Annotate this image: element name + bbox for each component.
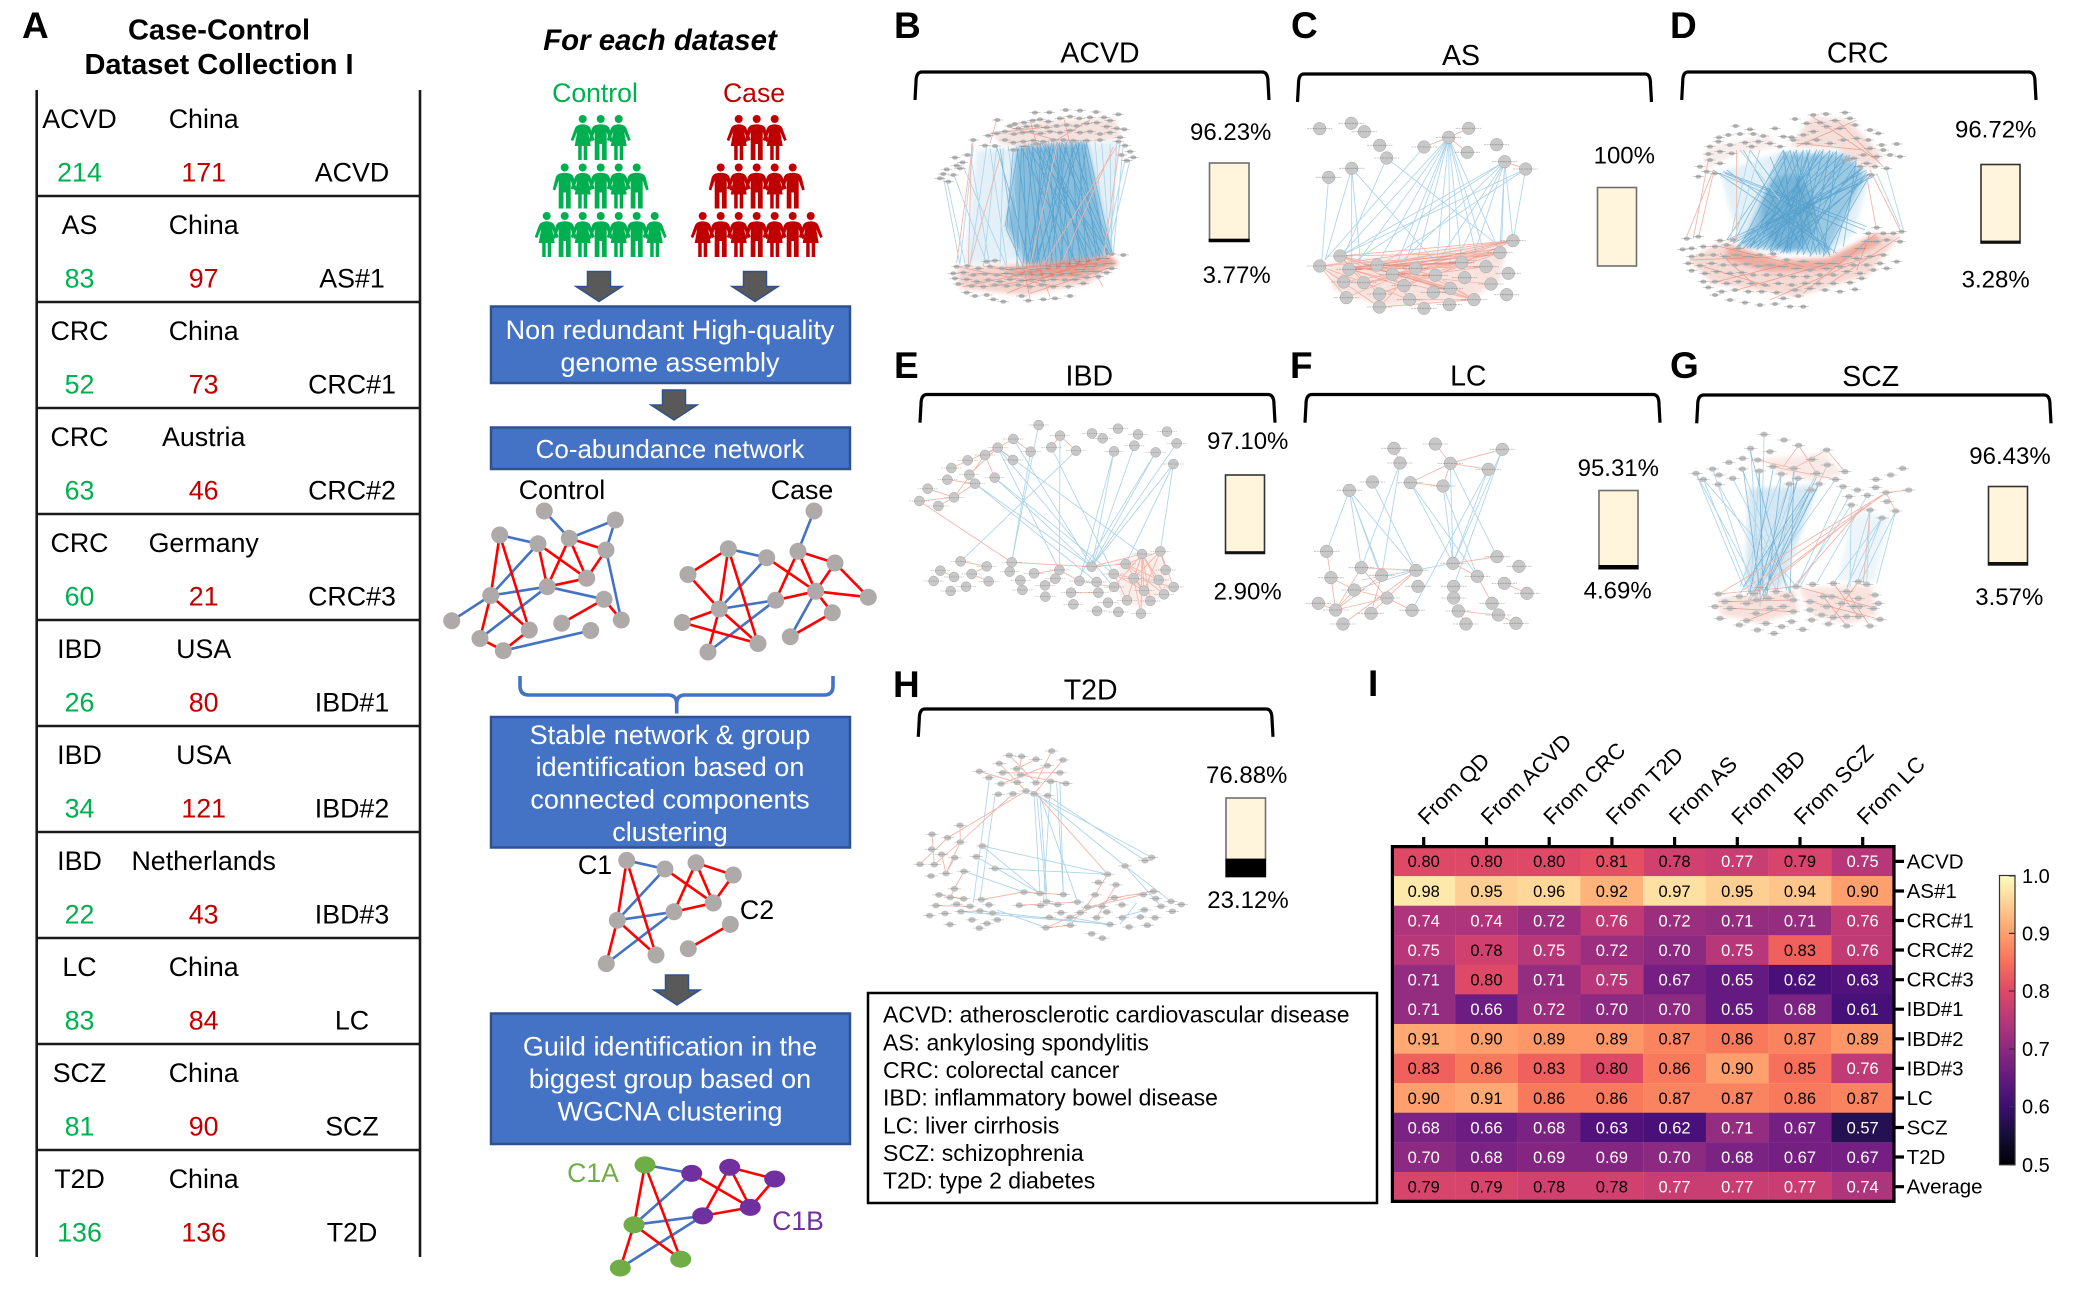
label: C1: C1 [578, 850, 612, 880]
heatmap cells: 0.90 [1408, 1090, 1440, 1108]
table row values: T2D [327, 1218, 377, 1248]
heatmap cells: 0.89 [1847, 1031, 1879, 1049]
heatmap cells: 0.72 [1533, 912, 1565, 930]
heatmap cells: 0.83 [1784, 942, 1816, 960]
heatmap cells: 0.90 [1470, 1031, 1503, 1049]
heatmap cells: 0.87 [1847, 1090, 1879, 1108]
heatmap cells: 0.97 [1658, 883, 1691, 901]
label: C1A: C1A [567, 1158, 619, 1188]
value 97.10%: 97.10% [1207, 428, 1288, 455]
value 96.43%: 96.43% [1969, 443, 2051, 470]
heatmap column labels: From T2D [1601, 742, 1688, 830]
heatmap row labels: IBD#2 [1907, 1028, 1964, 1051]
heatmap row labels: CRC#1 [1907, 910, 1974, 932]
network graph [920, 751, 1181, 938]
label: Case group: Case [723, 78, 785, 108]
heatmap cells: 0.57 [1847, 1119, 1879, 1137]
network graph [1683, 113, 1903, 307]
label: C2: C2 [740, 895, 774, 925]
title: IBD: IBD [1066, 361, 1113, 393]
legend: disease abbreviations: IBD: inflammatory bowel disease [883, 1085, 1218, 1111]
heatmap row labels: IBD#3 [1907, 1057, 1964, 1080]
table rules [36, 90, 421, 1257]
heatmap cells: 0.77 [1721, 1179, 1753, 1197]
table row values: 90 [189, 1112, 219, 1142]
panel B: ACVD network [894, 5, 1271, 302]
heatmap cells: 0.80 [1533, 853, 1565, 871]
panel C: AS network [1291, 5, 1655, 308]
workflow column [443, 24, 877, 1276]
panel label C: C [1291, 5, 1318, 46]
arrow: case to assembly [732, 272, 778, 302]
stacked bar: 96.43 / 3.57 [1988, 486, 2028, 565]
table row values: CRC#3 [308, 582, 396, 612]
box: genome assembly: Non redundant High-quality [506, 315, 835, 345]
icon: case people pyramid [691, 115, 823, 257]
box: guild identification [491, 1014, 850, 1144]
heatmap row labels: CRC#2 [1907, 939, 1974, 962]
label: C1B: C1B [772, 1206, 824, 1236]
heatmap cells: 0.70 [1658, 942, 1691, 960]
title: CRC: CRC [1827, 38, 1889, 70]
colour scale bar [2000, 866, 2050, 1177]
box: stable network identification: identification based on [536, 752, 804, 782]
table row values: 136 [57, 1218, 102, 1248]
bracket [915, 72, 1269, 100]
arrow: control to assembly [576, 272, 622, 302]
panel H: T2D network [893, 664, 1289, 938]
table row values: 46 [189, 476, 219, 506]
heatmap row labels: LC [1907, 1087, 1933, 1110]
network graph [1320, 123, 1526, 308]
heatmap cells: 0.68 [1533, 1119, 1565, 1137]
box: stable network identification: Stable network & group [530, 720, 810, 750]
heatmap cells: 0.80 [1596, 1060, 1628, 1078]
heatmap row labels: CRC#3 [1907, 969, 1974, 992]
table row values: T2D [54, 1164, 105, 1194]
heatmap cells: 0.89 [1533, 1031, 1565, 1049]
heatmap column labels: From AS [1664, 751, 1742, 830]
heatmap cells: 0.96 [1533, 883, 1565, 901]
panel label E: E [894, 345, 919, 386]
stacked bar: 96.72 / 3.28 [1980, 164, 2020, 244]
heatmap cells: 0.78 [1470, 942, 1503, 960]
heatmap cells: 0.94 [1784, 883, 1816, 901]
table row values: CRC [50, 316, 109, 346]
panel label H: H [893, 664, 920, 705]
legend: disease abbreviations: T2D: type 2 diabetes [883, 1168, 1095, 1194]
box: co-abundance network: Co-abundance network [536, 434, 805, 464]
table row values: 52 [65, 370, 94, 400]
heatmap cells: 0.63 [1596, 1119, 1628, 1137]
heatmap column labels [1413, 729, 1930, 830]
panel D: CRC network [1670, 5, 2036, 307]
box: guild identification: WGCNA clustering [557, 1096, 783, 1126]
table row values [42, 104, 396, 1248]
label: Control network: Control [519, 475, 605, 505]
network graph [919, 425, 1177, 614]
heatmap cells: 0.75 [1533, 942, 1565, 960]
heatmap row labels [1907, 850, 1983, 1199]
table row values: CRC#2 [308, 476, 396, 506]
box: genome assembly: genome assembly [560, 348, 780, 378]
heatmap column labels: From QD [1413, 748, 1494, 830]
table row values: LC [62, 952, 97, 982]
panel label A: A [22, 5, 49, 46]
value 4.69%: 4.69% [1584, 577, 1652, 604]
table row values: IBD [57, 740, 102, 770]
title: AS: AS [1442, 40, 1480, 72]
heatmap cells: 0.85 [1784, 1060, 1816, 1078]
stacked bar: 97.10 / 2.90 [1225, 475, 1265, 554]
colour scale bar: 0.9 [2022, 924, 2050, 946]
value 3.77%: 3.77% [1203, 262, 1271, 289]
heatmap cells: 0.74 [1847, 1179, 1879, 1197]
value 3.57%: 3.57% [1975, 584, 2043, 611]
table row values: China [169, 952, 239, 982]
arrow: assembly to network [651, 390, 697, 420]
table row values: SCZ [53, 1058, 106, 1088]
table row values: USA [176, 740, 231, 770]
heatmap cells: 0.86 [1470, 1060, 1503, 1078]
panel G: SCZ network [1670, 345, 2051, 633]
bracket [1305, 394, 1660, 423]
heatmap cells: 0.75 [1721, 942, 1753, 960]
table row values: IBD [57, 846, 102, 876]
heatmap cells: 0.79 [1408, 1179, 1440, 1197]
heatmap cells: 0.76 [1596, 912, 1628, 930]
diagram: control network [443, 502, 630, 659]
value 95.31%: 95.31% [1578, 455, 1659, 482]
table row values: China [169, 316, 239, 346]
panel label D: D [1670, 5, 1697, 46]
table row values: 136 [181, 1218, 226, 1248]
heatmap cells: 0.72 [1596, 942, 1628, 960]
colour scale bar: 0.6 [2022, 1097, 2050, 1119]
heatmap cells: 0.62 [1784, 972, 1816, 990]
value 96.23%: 96.23% [1190, 119, 1271, 146]
stacked bar: 76.88 / 23.12 [1226, 798, 1266, 877]
box: guild identification: Guild identification in the [523, 1032, 817, 1062]
heatmap column labels: From CRC [1538, 737, 1630, 830]
heatmap cells: 0.86 [1784, 1090, 1816, 1108]
legend: disease abbreviations: SCZ: schizophrenia [883, 1140, 1084, 1166]
heatmap row labels: Average [1907, 1176, 1983, 1199]
title: SCZ: SCZ [1842, 361, 1899, 393]
heatmap cells: 0.75 [1408, 942, 1440, 960]
heatmap cells: 0.79 [1470, 1179, 1503, 1197]
table row values: Germany [149, 528, 259, 558]
table row values: USA [176, 634, 231, 664]
heatmap cells: 0.76 [1847, 912, 1879, 930]
heatmap cells: 0.68 [1470, 1149, 1503, 1167]
colour scale bar: 0.8 [2022, 981, 2050, 1003]
table row values: China [169, 210, 239, 240]
diagram: case network [674, 502, 877, 660]
heatmap cells: 0.87 [1784, 1031, 1816, 1049]
title: LC: LC [1450, 361, 1487, 393]
heatmap cells: 0.77 [1658, 1179, 1691, 1197]
panel label F: F [1290, 345, 1313, 386]
bracket [920, 394, 1275, 423]
heatmap cells: 0.91 [1408, 1031, 1440, 1049]
heatmap cells: 0.86 [1533, 1090, 1565, 1108]
table row values: IBD#1 [315, 688, 389, 718]
heatmap cells: 0.95 [1470, 883, 1503, 901]
heatmap cells: 0.70 [1658, 1149, 1691, 1167]
title: T2D: T2D [1064, 674, 1118, 706]
table row values: Netherlands [131, 846, 276, 876]
network graph [940, 110, 1133, 302]
heatmap cells: 0.83 [1533, 1060, 1565, 1078]
label: Case network: Case [771, 475, 833, 505]
table row values: AS#1 [319, 264, 385, 294]
bracket [1682, 72, 2036, 100]
heatmap cells: 0.67 [1847, 1149, 1879, 1167]
bracket [1298, 74, 1652, 102]
table row values: 73 [189, 370, 219, 400]
value 96.72%: 96.72% [1955, 116, 2036, 143]
table row values: LC [335, 1006, 369, 1036]
heatmap cells: 0.69 [1596, 1149, 1628, 1167]
value 3.28%: 3.28% [1962, 267, 2030, 294]
table row values: 81 [65, 1112, 94, 1142]
network graph [1318, 444, 1527, 624]
table row values: 121 [181, 794, 226, 824]
heatmap cells: 0.68 [1784, 1001, 1816, 1019]
heatmap cells: 0.63 [1847, 972, 1879, 990]
heatmap column labels: From LC [1852, 751, 1930, 830]
heatmap cells: 0.71 [1408, 1001, 1440, 1019]
heatmap cells: 0.77 [1784, 1179, 1816, 1197]
table row values: China [169, 1164, 239, 1194]
table row values: 21 [189, 582, 219, 612]
heatmap cells: 0.65 [1721, 972, 1753, 990]
legend: disease abbreviations: ACVD: atherosclerotic cardiovascular disease [883, 1002, 1350, 1028]
table row values: 26 [65, 688, 94, 718]
table row values: ACVD [315, 158, 389, 188]
heatmap cells: 0.90 [1847, 883, 1879, 901]
heatmap cells: 0.71 [1533, 972, 1565, 990]
heatmap cells: 0.74 [1408, 912, 1440, 930]
value 76.88%: 76.88% [1206, 762, 1287, 789]
table row values: 83 [65, 264, 94, 294]
heatmap cells: 0.70 [1658, 1001, 1691, 1019]
heatmap cells: 0.87 [1658, 1031, 1691, 1049]
heatmap cells: 0.67 [1658, 972, 1691, 990]
heatmap cells: 0.76 [1847, 942, 1879, 960]
table row values: 22 [65, 900, 94, 930]
heatmap cells: 0.66 [1470, 1119, 1503, 1137]
heatmap cells: 0.90 [1721, 1060, 1753, 1078]
table row values: 43 [189, 900, 219, 930]
colour scale bar: 0.5 [2022, 1155, 2050, 1177]
bracket [1697, 395, 2051, 423]
heading: Case-Control Dataset Collection I: Case-Control [128, 14, 310, 46]
heatmap cells: 0.62 [1658, 1119, 1691, 1137]
colour scale bar: 1.0 [2022, 866, 2050, 888]
table row values: SCZ [325, 1112, 379, 1142]
heatmap column labels: From IBD [1726, 745, 1811, 830]
stacked bar: 95.31 / 4.69 [1598, 490, 1638, 569]
arrow: components to guilds [654, 975, 700, 1005]
table row values: AS [62, 210, 97, 240]
heatmap cells: 0.92 [1596, 883, 1628, 901]
table row values: IBD#2 [315, 794, 389, 824]
heatmap cells: 0.80 [1470, 853, 1503, 871]
heatmap cells: 0.87 [1658, 1090, 1691, 1108]
box: stable network identification [491, 717, 850, 848]
heatmap cells: 0.71 [1784, 912, 1816, 930]
table row values: 83 [65, 1006, 94, 1036]
table row values: IBD [57, 634, 102, 664]
legend: disease abbreviations: LC: liver cirrhosis [883, 1112, 1059, 1138]
legend: disease abbreviations: AS: ankylosing spondylitis [883, 1029, 1149, 1055]
heatmap cells: 0.70 [1596, 1001, 1628, 1019]
title: ACVD: ACVD [1060, 38, 1140, 70]
table row values: IBD#3 [315, 900, 389, 930]
panel E: IBD network [894, 345, 1288, 614]
label: Control group: Control [552, 78, 638, 108]
heatmap column labels: From ACVD [1476, 729, 1577, 830]
heatmap cells: 0.87 [1721, 1090, 1753, 1108]
table row values: 60 [65, 582, 94, 612]
heatmap row labels: T2D [1907, 1146, 1945, 1169]
heatmap cells: 0.76 [1847, 1060, 1879, 1078]
table row values: 214 [57, 158, 102, 188]
value 23.12%: 23.12% [1207, 887, 1289, 914]
heatmap cells: 0.78 [1658, 853, 1691, 871]
bracket [918, 709, 1273, 737]
diagram: C1 and C2 components [598, 852, 742, 972]
heatmap cells: 0.70 [1408, 1149, 1440, 1167]
heatmap cells: 0.68 [1408, 1119, 1440, 1137]
heatmap cells: 0.74 [1470, 912, 1503, 930]
legend: disease abbreviations [868, 993, 1377, 1203]
value 2.90%: 2.90% [1214, 578, 1282, 605]
heatmap cells: 0.67 [1784, 1149, 1816, 1167]
heatmap cells: 0.61 [1847, 1001, 1879, 1019]
heatmap cells: 0.66 [1470, 1001, 1503, 1019]
panel label I: I [1368, 663, 1378, 704]
heatmap cells: 0.72 [1658, 912, 1691, 930]
heatmap cells: 0.86 [1658, 1060, 1691, 1078]
table row values: 171 [181, 158, 226, 188]
heatmap cells: 0.71 [1721, 1119, 1753, 1137]
heatmap row labels: IBD#1 [1907, 998, 1964, 1021]
table row values: China [169, 104, 239, 134]
stacked bar: 100% [1598, 188, 1636, 266]
network graph [1696, 434, 1909, 633]
icon: control people pyramid [535, 115, 667, 257]
table row values: 63 [65, 476, 94, 506]
heatmap cells: 0.83 [1408, 1060, 1440, 1078]
panel label G: G [1670, 345, 1699, 386]
heatmap cells [1392, 847, 1894, 1202]
heatmap row labels: ACVD [1907, 850, 1964, 874]
heatmap cells: 0.72 [1533, 1001, 1565, 1019]
heading: Case-Control Dataset Collection I: Dataset Collection I [84, 49, 354, 81]
heatmap cells: 0.75 [1847, 853, 1879, 871]
table row values: 97 [189, 264, 219, 294]
heatmap cells: 0.80 [1470, 972, 1503, 990]
heatmap row labels: SCZ [1907, 1116, 1948, 1140]
box: guild identification: biggest group based on [529, 1064, 811, 1094]
diagram: guild network [610, 1156, 785, 1276]
heatmap cells: 0.89 [1596, 1031, 1628, 1049]
heatmap column labels: From SCZ [1789, 740, 1878, 830]
heatmap cells: 0.91 [1470, 1090, 1503, 1108]
box: stable network identification: connected components [530, 784, 810, 814]
heatmap cells: 0.65 [1721, 1001, 1753, 1019]
heatmap cells: 0.75 [1596, 972, 1628, 990]
heatmap cells: 0.77 [1721, 853, 1753, 871]
heatmap frame and ticks [1392, 837, 1904, 1201]
panel F: LC network [1290, 345, 1660, 624]
value 100%: 100% [1594, 142, 1655, 169]
panel I: heatmap [1368, 663, 2050, 1202]
heading: For each dataset: For each dataset [543, 24, 778, 57]
heatmap cells: 0.78 [1533, 1179, 1565, 1197]
heatmap cells: 0.86 [1721, 1031, 1753, 1049]
table row values: CRC [50, 528, 109, 558]
table row values: 80 [189, 688, 219, 718]
heatmap cells: 0.95 [1721, 883, 1753, 901]
heatmap cells: 0.69 [1533, 1149, 1565, 1167]
heatmap cells: 0.80 [1408, 853, 1440, 871]
colour scale bar: 0.7 [2022, 1039, 2050, 1061]
table row values: Austria [162, 422, 245, 452]
heatmap cells: 0.86 [1596, 1090, 1628, 1108]
box: co-abundance network [491, 428, 850, 469]
heatmap cells: 0.68 [1721, 1149, 1753, 1167]
table row values: China [169, 1058, 239, 1088]
heatmap cells: 0.98 [1408, 883, 1440, 901]
heatmap row labels: AS#1 [1907, 880, 1957, 903]
table row values: 34 [65, 794, 94, 824]
box: stable network identification: clustering [612, 817, 728, 847]
table row values: CRC [50, 422, 109, 452]
stacked bar: 96.23 / 3.77 [1209, 163, 1250, 242]
heatmap cells: 0.81 [1596, 853, 1628, 871]
legend: disease abbreviations: CRC: colorectal cancer [883, 1057, 1120, 1083]
table row values: ACVD [42, 104, 117, 134]
heatmap cells: 0.71 [1721, 912, 1753, 930]
panel label B: B [894, 5, 921, 46]
box: genome assembly [491, 306, 850, 383]
panel A: dataset collection table [22, 5, 421, 1257]
table row values: CRC#1 [308, 370, 396, 400]
heatmap cells: 0.71 [1408, 972, 1440, 990]
heatmap cells: 0.67 [1784, 1119, 1816, 1137]
heatmap cells: 0.78 [1596, 1179, 1628, 1197]
table row values: 84 [189, 1006, 219, 1036]
brace joining networks [520, 676, 833, 714]
heatmap cells: 0.79 [1784, 853, 1816, 871]
